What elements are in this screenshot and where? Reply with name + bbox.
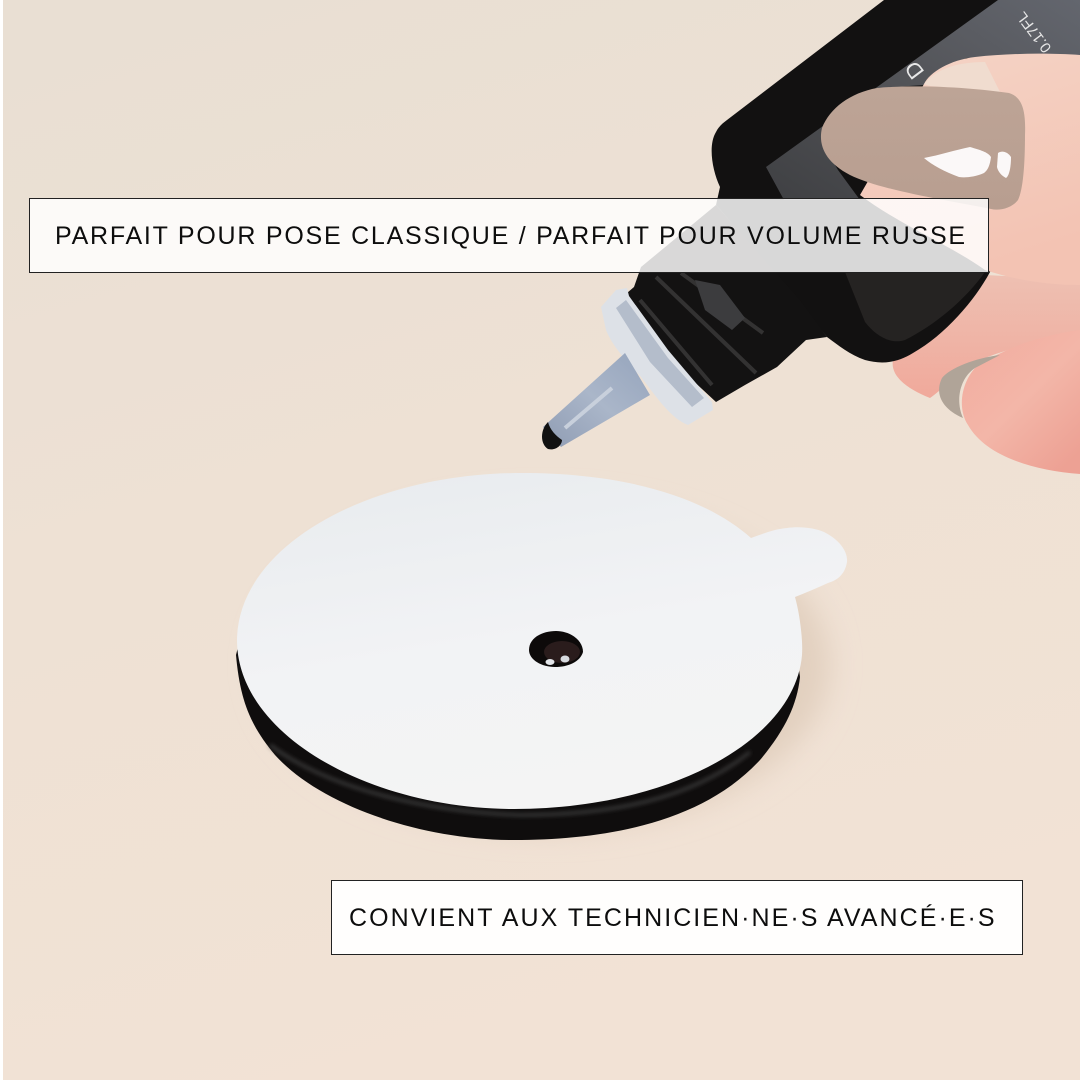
- label: technique suitability: [29, 198, 989, 273]
- small nail: [939, 355, 1000, 418]
- ring finger: [962, 330, 1080, 474]
- bottle: [542, 0, 1080, 449]
- disc shadow: [260, 500, 830, 830]
- glue tip: [542, 422, 562, 449]
- bottle body: [712, 0, 1080, 362]
- neck highlights: [640, 273, 763, 385]
- black disc base: [236, 600, 800, 840]
- glue drop: [529, 631, 583, 667]
- bottle letter: D: [899, 56, 929, 84]
- thumb and nail: [821, 54, 1080, 285]
- label: advanced technicians: [331, 880, 1023, 955]
- label: technique suitability: PARFAIT POUR POSE CLASSIQUE / PARFAIT POUR VOLUME RUSSE: [55, 222, 967, 250]
- middle finger: [893, 275, 1080, 398]
- silver label band: [766, 0, 1080, 200]
- nozzle highlight: [565, 388, 612, 428]
- nail highlight small: [997, 152, 1011, 178]
- thumb: [860, 54, 1080, 285]
- cuticle light: [924, 62, 1000, 92]
- label: advanced technicians: CONVIENT AUX TECHNICIEN·NE·S AVANCÉ·E·S: [349, 904, 997, 932]
- threaded neck: [627, 205, 827, 402]
- white collar: [601, 288, 713, 425]
- nail: [821, 86, 1025, 210]
- left photo edge: [0, 0, 3, 1080]
- disc rim highlight: [270, 745, 750, 815]
- nail highlight large: [924, 147, 991, 177]
- neck sheen: [695, 280, 745, 330]
- bottle text: 0.17FL: [1014, 8, 1055, 56]
- collar blue stripe: [616, 300, 704, 407]
- hand lower fingers: [893, 275, 1080, 474]
- nozzle: [543, 353, 650, 447]
- white glue sticker with tab: [237, 473, 847, 809]
- bottle lower sheen: [845, 272, 985, 341]
